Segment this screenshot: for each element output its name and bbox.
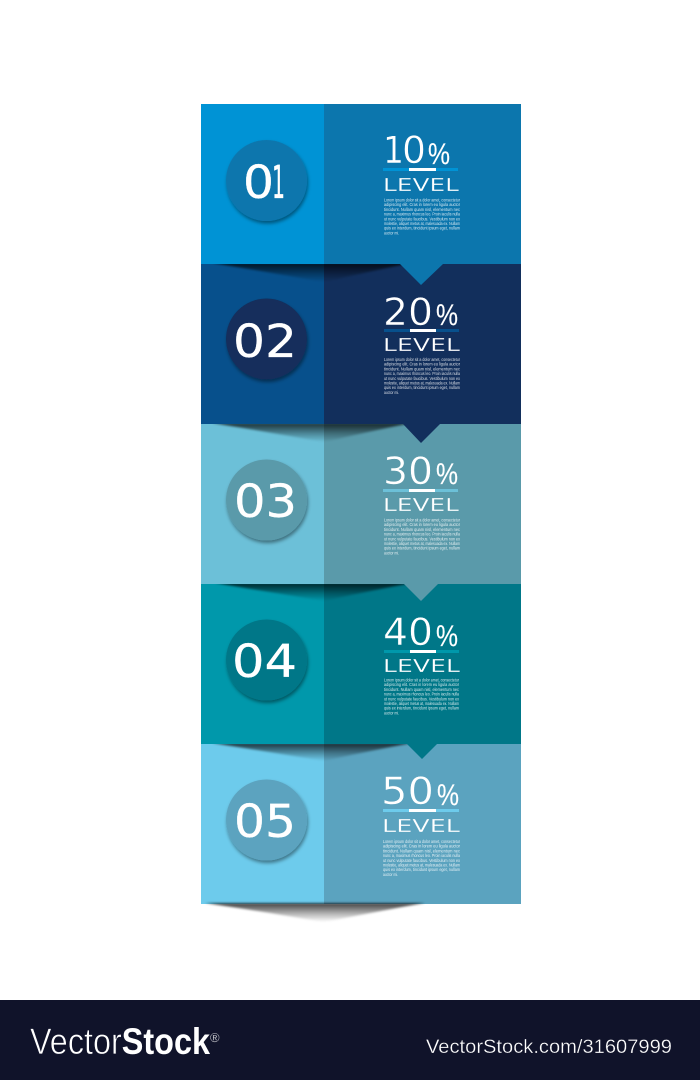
percentage: [383, 291, 458, 334]
paragraph: Lorem ipsum dolor sit a dolor amet, consectetur: [384, 357, 461, 362]
paragraph: tincidunt. Nullam quam nisl, elementum nec: [384, 207, 460, 212]
paragraph: [383, 839, 461, 877]
percentage: %: [437, 779, 459, 812]
circle badge: [226, 780, 307, 860]
paragraph: nunc a, maximus rhoncus leo. Proin iaculis nulla: [384, 371, 461, 376]
paragraph: Lorem ipsum dolor sit a dolor amet, consectetur: [384, 198, 461, 202]
paragraph: Lorem ipsum dolor sit a dolor amet, consectetur: [384, 518, 461, 522]
percentage: %: [436, 458, 458, 491]
notch: [400, 264, 443, 285]
panel: level 05: [201, 743, 521, 904]
paragraph: ut nunc vulputate faucibus. Vestibulum non ex: [384, 216, 461, 221]
paragraph: adipiscing elit. Cras in lorem eu ligula auctor: [384, 362, 461, 367]
paragraph: ut nunc vulputate faucibus. Vestibulum non ex: [384, 696, 460, 701]
paragraph: molestie, aliquet metus at, malesuada ex. Nullam: [384, 701, 459, 706]
percentage: %: [436, 620, 458, 653]
paragraph: [384, 678, 460, 715]
percentage: 30: [383, 450, 433, 493]
paragraph: nunc a, maximus rhoncus leo. Proin iaculis nulla: [384, 532, 461, 537]
level label: LEVEL: [383, 335, 460, 356]
circle badge: [226, 298, 307, 380]
paragraph: quis ex interdum, tincidunt ipsum eget, nullam: [384, 226, 460, 231]
panel: level 02: [201, 263, 521, 424]
paragraph: quis ex interdum, tincidunt ipsum eget, nullam: [384, 706, 459, 711]
paragraph: ut nunc vulputate faucibus. Vestibulum non ex: [383, 858, 461, 863]
paragraph: Lorem ipsum dolor sit a dolor amet, consectetur: [383, 839, 461, 844]
badge number: 04: [232, 635, 297, 688]
bar: [383, 809, 459, 812]
paragraph: adipiscing elit. Cras in lorem eu ligula auctor: [383, 844, 461, 849]
circle badge: [226, 140, 307, 221]
fold shadow: [212, 743, 412, 761]
percentage: %: [436, 299, 458, 332]
paragraph: auctor mi.: [384, 390, 399, 395]
bar: [384, 329, 459, 332]
paragraph: quis ex interdum, tincidunt ipsum eget, nullam: [384, 546, 460, 551]
paragraph: auctor mi.: [384, 710, 399, 715]
panel: level 03: [201, 423, 521, 584]
level label: LEVEL: [383, 175, 459, 196]
paragraph: molestie, aliquet metus at, malesuada ex. Nullam: [384, 221, 460, 226]
paragraph: [384, 198, 461, 235]
fold shadow: [212, 423, 412, 442]
paragraph: tincidunt. Nullam quam nisl, elementum nec: [384, 527, 460, 532]
paragraph: nunc a, maximus rhoncus leo. Proin iaculis nulla: [384, 692, 460, 697]
paragraph: tincidunt. Nullam quam nisl, elementum nec: [384, 366, 460, 371]
level label: LEVEL: [382, 816, 460, 837]
circle badge: [226, 460, 307, 540]
paragraph: tincidunt. Nullam quam nisl, elementum nec: [383, 848, 460, 853]
circle badge: [226, 620, 307, 700]
paragraph: auctor mi.: [384, 550, 399, 555]
paragraph: nunc a, maximus rhoncus leo. Proin iaculis nulla: [384, 212, 461, 217]
badge number: 02: [233, 315, 297, 368]
notch: [407, 744, 437, 759]
panel: level 01: [201, 104, 521, 264]
percentage: 50: [381, 770, 434, 813]
registered mark: ®: [210, 1030, 220, 1045]
paragraph: auctor mi.: [384, 230, 399, 235]
paragraph: adipiscing elit. Cras in lorem eu ligula auctor: [384, 202, 461, 207]
notch: [403, 424, 440, 443]
badge number: 05: [234, 795, 296, 848]
badge number: 03: [234, 475, 297, 528]
panel: level 04: [201, 583, 521, 744]
bar: [384, 650, 459, 653]
paragraph: auctor mi.: [383, 872, 398, 877]
paragraph: quis ex interdum, tincidunt ipsum eget, nullam: [383, 867, 460, 872]
paragraph: [384, 518, 461, 555]
paragraph: [384, 357, 461, 395]
bar: [383, 168, 458, 171]
percentage: [381, 770, 459, 813]
paragraph: nunc a, maximus rhoncus leo. Proin iaculis nulla: [383, 853, 461, 858]
percentage: 1: [383, 129, 404, 172]
panel: level 01: 1: [272, 156, 285, 209]
fold shadow: [215, 583, 412, 601]
percentage: [383, 611, 458, 654]
paragraph: molestie, aliquet metus at, malesuada ex. Nullam: [384, 380, 460, 386]
paragraph: Lorem ipsum dolor sit a dolor amet, consectetur: [384, 678, 460, 682]
paragraph: adipiscing elit. Cras in lorem eu ligula auctor: [384, 682, 460, 687]
percentage: %: [428, 138, 450, 171]
paragraph: tincidunt. Nullam quam nisl, elementum nec: [384, 687, 459, 692]
percentage: 0: [402, 129, 426, 172]
footer bar: [0, 1000, 700, 1080]
paragraph: ut nunc vulputate faucibus. Vestibulum non ex: [384, 376, 461, 381]
level label: LEVEL: [383, 656, 460, 677]
image id: VectorStock.com/31607999: [426, 1036, 672, 1058]
fold shadow: [212, 263, 412, 282]
bar: [383, 489, 458, 492]
paragraph: molestie, aliquet metus at, malesuada ex. Nullam: [384, 541, 460, 546]
bottom fold shadow: [205, 903, 425, 922]
percentage: [383, 450, 458, 493]
level label: LEVEL: [383, 495, 459, 516]
badge number: 0: [243, 156, 274, 209]
percentage: 40: [383, 611, 433, 654]
paragraph: ut nunc vulputate faucibus. Vestibulum non ex: [384, 536, 461, 541]
paragraph: molestie, aliquet metus at, malesuada ex. Nullam: [383, 862, 460, 868]
notch: [404, 584, 438, 601]
percentage: [383, 129, 450, 172]
paragraph: quis ex interdum, tincidunt ipsum eget, nullam: [384, 385, 460, 390]
percentage: 20: [383, 291, 433, 334]
logo wordmark: VectorStock: [30, 1021, 210, 1062]
paragraph: adipiscing elit. Cras in lorem eu ligula auctor: [384, 522, 461, 527]
